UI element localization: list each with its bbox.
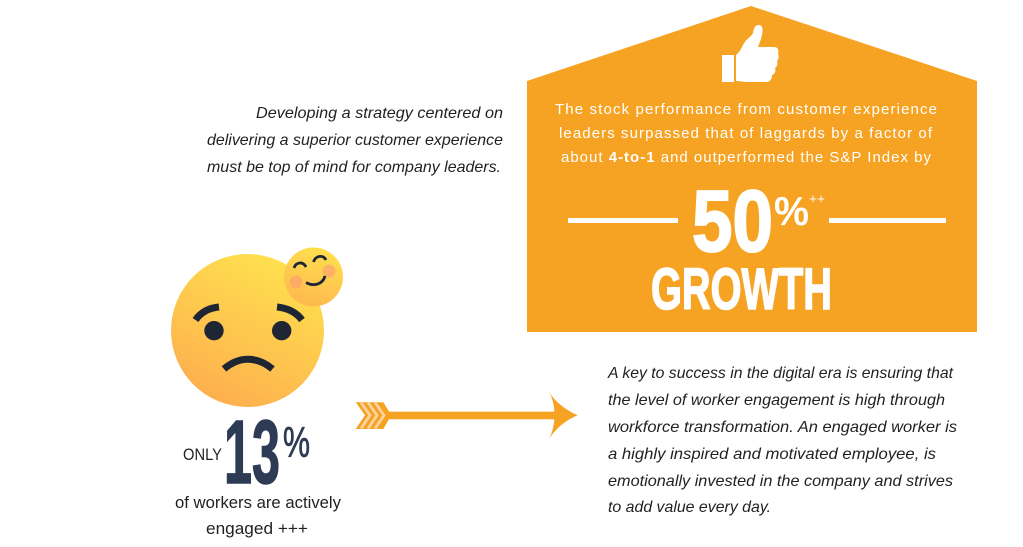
- digital era paragraph: the level of worker engagement is high through: [608, 392, 945, 409]
- intro statement: Developing a strategy centered on: [256, 105, 503, 122]
- digital era paragraph: emotionally invested in the company and strives: [608, 473, 953, 490]
- digital era paragraph: workforce transformation. An engaged worker is: [608, 419, 957, 436]
- right rule: [829, 218, 946, 223]
- engagement statistic: %: [283, 419, 310, 467]
- engagement statistic: ONLY: [183, 445, 222, 464]
- digital era paragraph: to add value every day.: [608, 499, 771, 516]
- growth description: [555, 101, 937, 166]
- digital era paragraph: A key to success in the digital era is ensuring that: [607, 365, 954, 382]
- engagement statistic: 13: [224, 403, 280, 503]
- left rule: [568, 218, 678, 223]
- growth description: leaders surpassed that of laggards by a factor of: [559, 125, 933, 142]
- growth description: The stock performance from customer experience: [555, 101, 937, 118]
- icon: thumbs up: [722, 25, 779, 82]
- engagement statistic: of workers are actively: [175, 493, 341, 512]
- house shape: [527, 6, 977, 332]
- sad face: [171, 254, 324, 407]
- small smiling face: [284, 248, 343, 306]
- digital era paragraph: a highly inspired and motivated employee, is: [608, 446, 936, 463]
- growth heading: GROWTH: [651, 257, 832, 322]
- intro statement: delivering a superior customer experience: [207, 132, 503, 149]
- 50 percent figure: 50: [692, 173, 773, 270]
- digital era paragraph: [607, 365, 957, 516]
- intro statement: [207, 105, 503, 176]
- arrow: [356, 392, 578, 439]
- 50 percent figure: ++: [809, 191, 825, 206]
- panel: growth house: [527, 6, 977, 332]
- engagement statistic: [175, 403, 341, 538]
- intro statement: must be top of mind for company leaders.: [207, 159, 501, 176]
- 50 percent figure: %: [774, 188, 809, 234]
- engagement statistic: engaged +++: [206, 519, 308, 538]
- growth description: about 4-to-1 and outperformed the S&P Index by: [561, 149, 932, 166]
- icon: sad emoji with small smiling emoji: [171, 248, 343, 407]
